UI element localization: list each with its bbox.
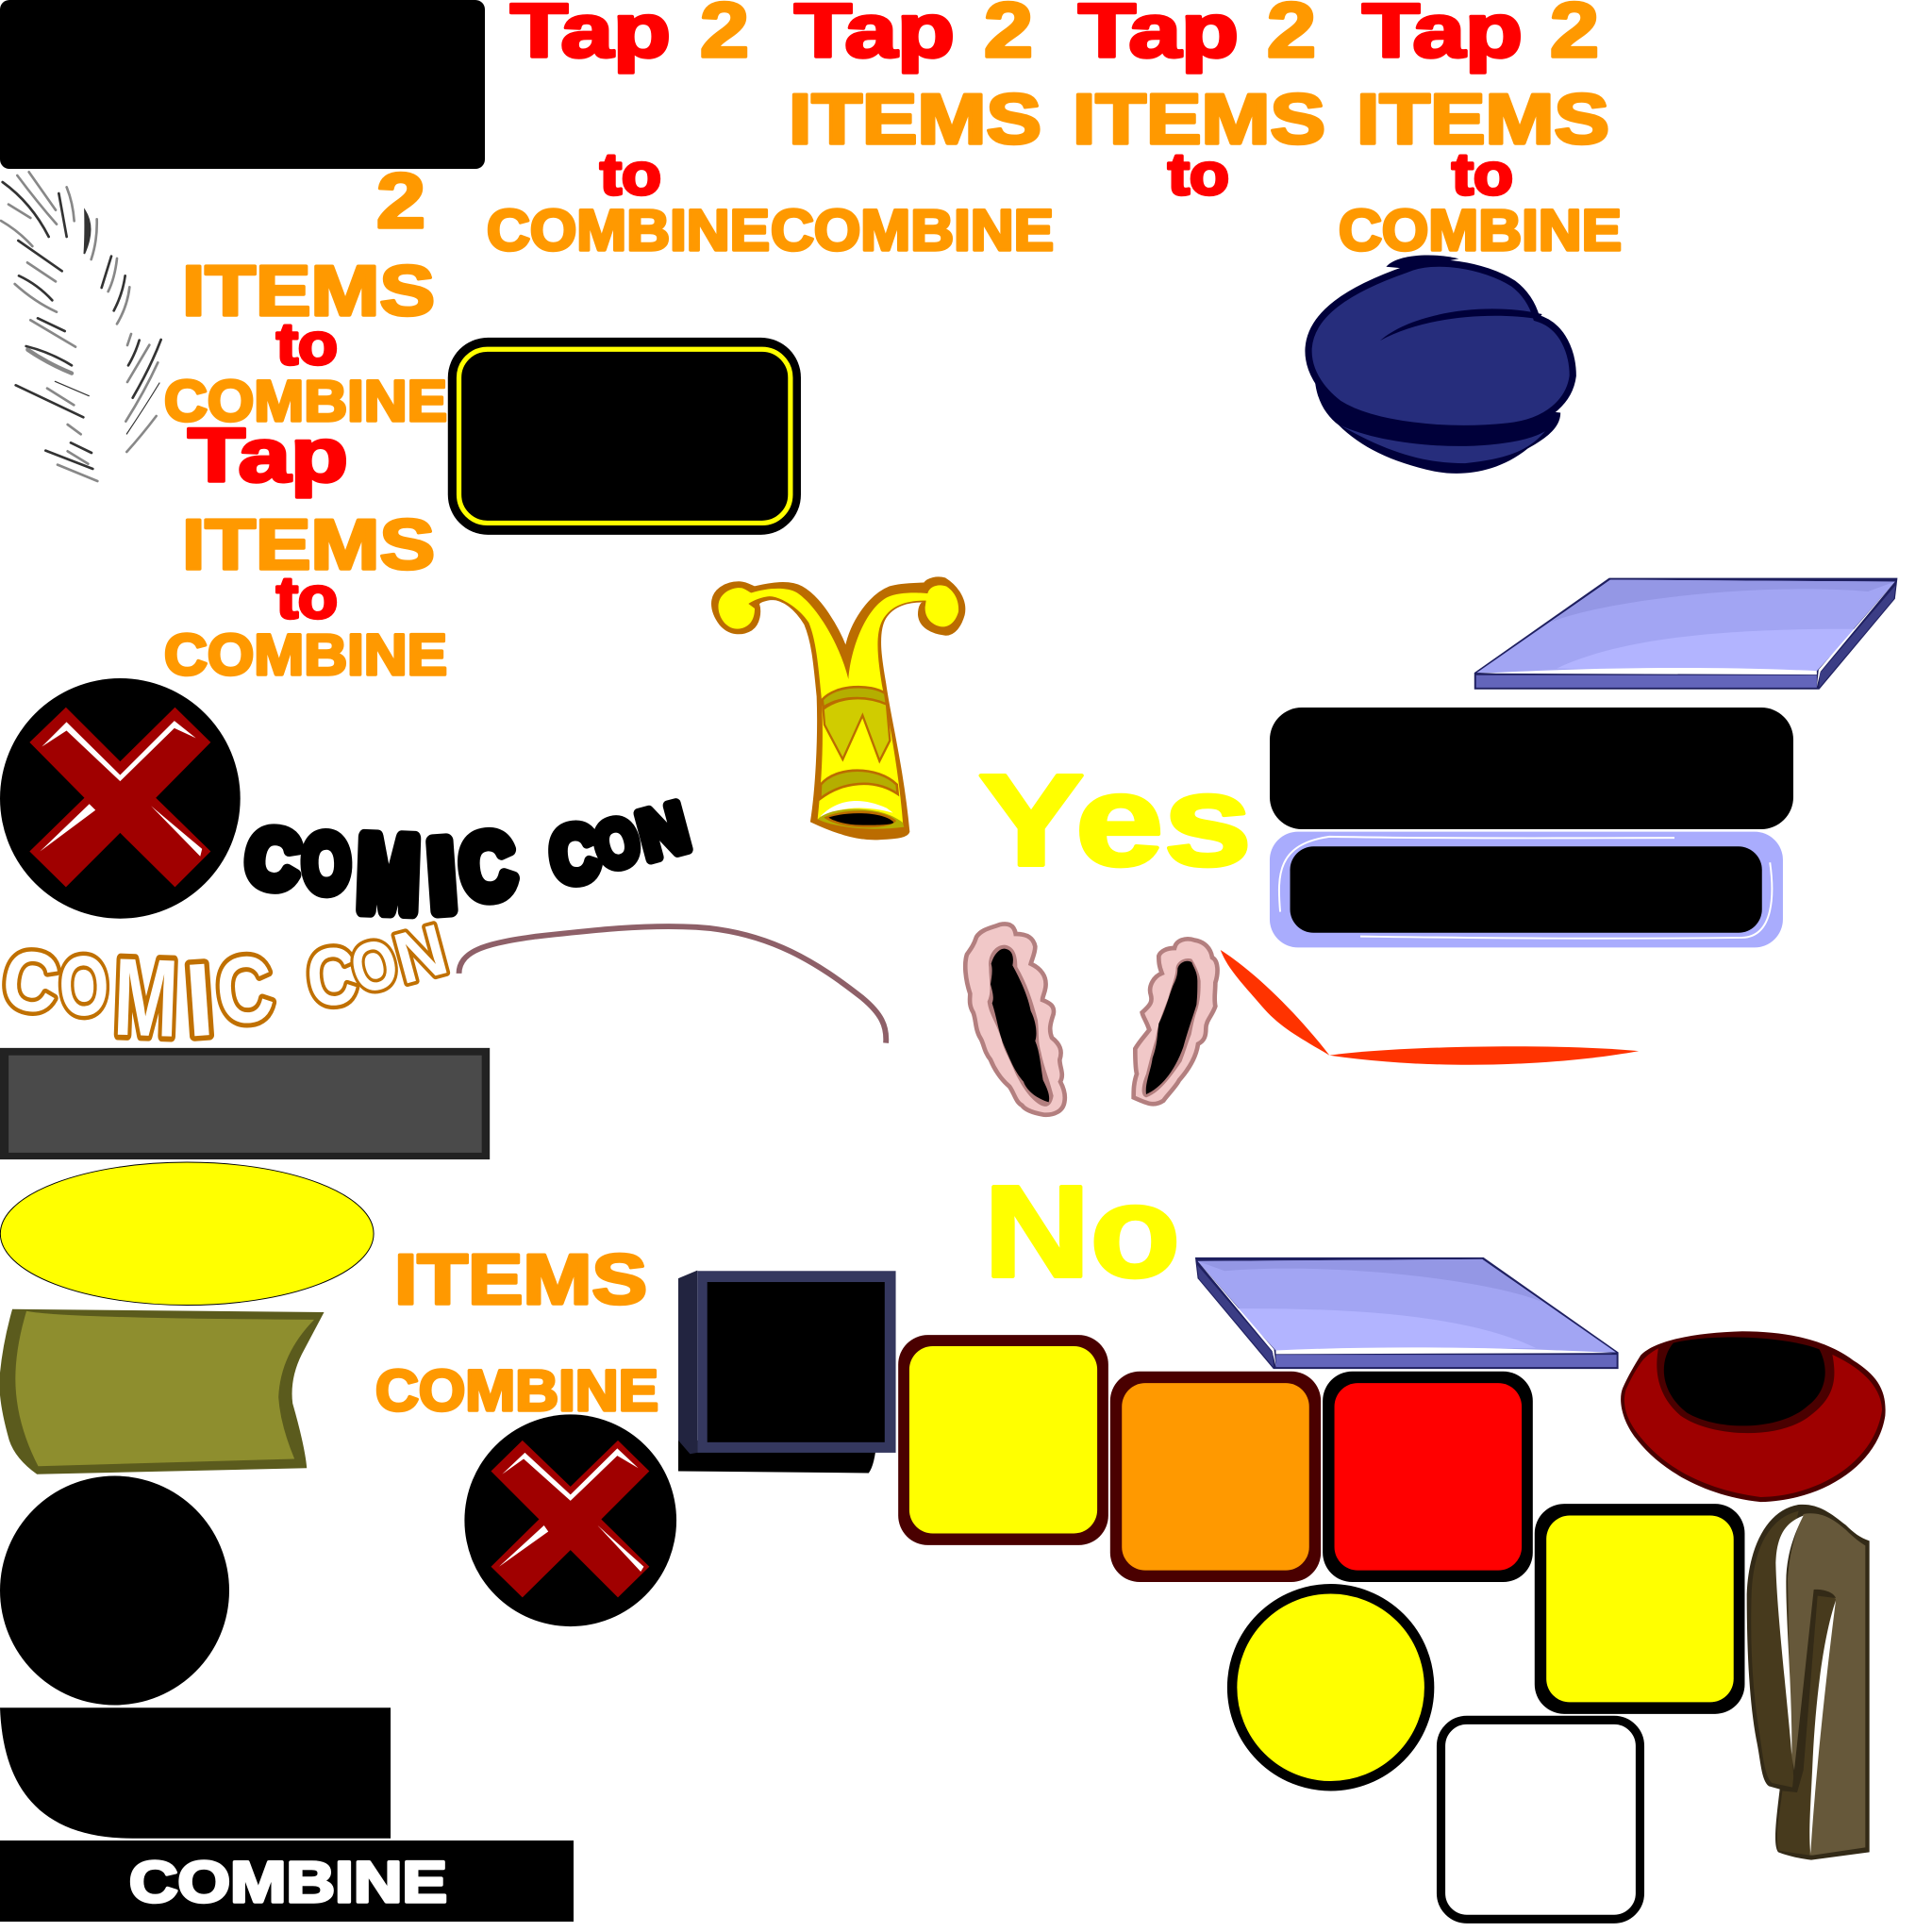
black COMIC CON lettering: C <box>241 809 306 908</box>
outlined COMIC CON lettering: C <box>303 929 361 1025</box>
black COMIC CON lettering: O <box>587 803 647 885</box>
black COMBINE bar <box>0 1840 574 1922</box>
heading row: COMBINE repeated <box>487 198 1622 262</box>
icon: large red X badge <box>0 678 241 919</box>
outlined COMIC CON lettering: O <box>58 938 110 1034</box>
outlined COMIC CON lettering: O <box>342 924 407 1009</box>
grey rectangle panel <box>0 1048 490 1159</box>
black COMIC CON lettering: C <box>546 808 603 901</box>
heading row: COMBINE repeated: COMBINE <box>1339 198 1622 262</box>
black COMIC CON lettering: M <box>356 815 421 934</box>
text stack: 2 items to combine: COMBINE <box>164 369 447 433</box>
black COMIC CON lettering: O <box>301 818 352 910</box>
black panel in lilac frame <box>1270 832 1783 947</box>
heading row: to repeated: to <box>1452 142 1513 208</box>
black panel with yellow border <box>448 338 801 535</box>
outlined COMIC CON lettering: I <box>181 941 217 1058</box>
text stack: Tap items to combine <box>164 413 447 687</box>
yellow ellipse <box>0 1162 374 1306</box>
icon: small red X badge <box>464 1414 676 1626</box>
COMBINE label: COMBINE <box>375 1358 658 1423</box>
icon: jester hat <box>712 577 964 839</box>
heading row: to repeated: to <box>1168 142 1229 208</box>
black COMBINE bar: COMBINE <box>129 1850 447 1914</box>
red tile <box>1323 1372 1533 1582</box>
outlined COMIC CON lettering: N <box>386 908 455 999</box>
black rounded panel <box>1270 708 1793 829</box>
outlined COMIC CON lettering: M <box>111 936 180 1060</box>
black COMIC CON lettering: N <box>630 789 696 875</box>
text stack: 2 items to combine: 2 <box>376 157 425 244</box>
black banner top left <box>0 0 485 169</box>
text stack: 2 items to combine <box>164 157 447 433</box>
yellow tile dark red border <box>898 1335 1108 1545</box>
text stack: Tap items to combine: ITEMS <box>182 505 435 584</box>
white tile <box>1441 1720 1640 1919</box>
heading row: ITEMS repeated: ITEMS <box>1073 79 1325 158</box>
text stack: 2 items to combine: to <box>276 312 338 377</box>
black COMIC CON lettering: I <box>425 818 458 933</box>
icon: purple plate top right <box>1474 578 1897 690</box>
icon: blue beret hat <box>1308 255 1573 474</box>
text stack: Tap items to combine: COMBINE <box>164 623 447 687</box>
text stack: 2 items to combine: ITEMS <box>182 251 435 330</box>
yellow tile black border <box>1535 1504 1744 1714</box>
heading row: ITEMS repeated: ITEMS <box>789 79 1041 158</box>
heading row: ITEMS repeated <box>789 79 1609 158</box>
mauve arc stroke <box>459 926 886 1043</box>
black COMIC CON lettering: C <box>455 813 520 920</box>
outlined COMIC CON lettering: C <box>211 935 279 1045</box>
feather sketch strokes <box>1 172 161 481</box>
icon: pink ears <box>965 924 1218 1115</box>
navy box frame <box>678 1271 896 1473</box>
black rounded-corner block <box>0 1707 391 1839</box>
heading row: ITEMS repeated: ITEMS <box>1357 79 1609 158</box>
olive banner shape <box>0 1309 325 1474</box>
black circle <box>0 1475 229 1706</box>
heading row: COMBINE repeated: COMBINE <box>487 198 770 262</box>
icon: brown coat <box>1747 1505 1870 1860</box>
heading row: to repeated <box>600 142 1513 208</box>
red swooshes <box>1221 950 1639 1065</box>
icon: purple plate lower <box>1195 1257 1619 1369</box>
icon: red hat <box>1621 1331 1886 1502</box>
outlined COMIC CON lettering <box>0 908 455 1060</box>
No label: No <box>984 1159 1180 1305</box>
heading row: to repeated: to <box>600 142 661 208</box>
black COMIC CON lettering <box>241 789 696 934</box>
heading row: Tap 2 repeated <box>510 0 1599 74</box>
ITEMS label: ITEMS <box>394 1240 647 1319</box>
text stack: Tap items to combine: to <box>276 566 338 631</box>
yellow circle <box>1232 1589 1429 1786</box>
Yes label: Yes <box>978 748 1252 893</box>
text stack: Tap items to combine: Tap <box>188 413 348 498</box>
heading row: COMBINE repeated: COMBINE <box>771 198 1054 262</box>
orange tile <box>1110 1372 1321 1582</box>
